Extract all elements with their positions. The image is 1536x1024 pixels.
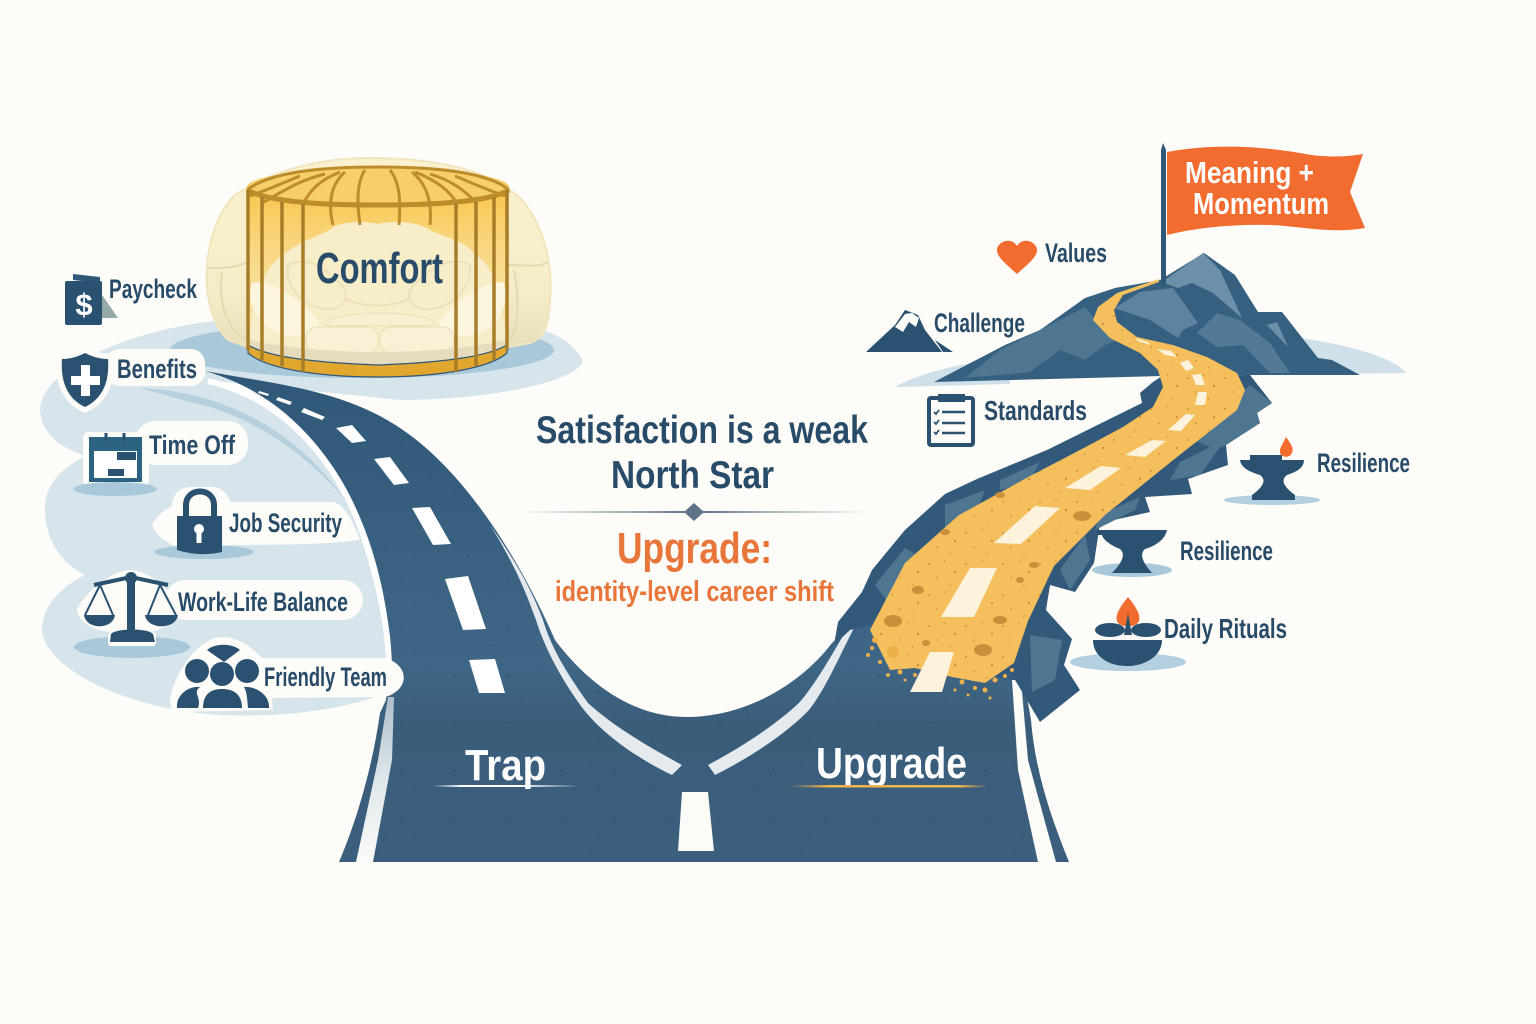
headline: Satisfaction is a weak	[536, 409, 868, 452]
center message: North Star	[611, 454, 774, 497]
left road white edge	[208, 381, 389, 695]
item: Paycheck: Paycheck	[109, 274, 198, 304]
sofa	[250, 222, 507, 367]
item: Challenge: Challenge	[934, 308, 1025, 338]
item: Resilience upper	[1224, 437, 1410, 505]
road surface	[205, 371, 1069, 862]
center message: identity-level career shift	[555, 576, 834, 608]
gold base	[248, 345, 507, 377]
flag	[1161, 143, 1365, 285]
item: Benefits: Benefits	[117, 354, 197, 384]
item: Resilience lower	[1092, 530, 1273, 577]
item: Standards: Standards	[984, 395, 1087, 426]
path dashes	[910, 338, 1207, 692]
cushion	[207, 158, 551, 347]
road shadow sliver	[140, 388, 345, 500]
item: Time Off: Time Off	[149, 430, 236, 460]
road network	[205, 371, 1069, 862]
item: Values: Values	[1045, 238, 1107, 268]
item: Work-Life Balance: Work-Life Balance	[178, 587, 348, 617]
cage glow	[248, 190, 507, 371]
label: Trap: Trap	[465, 741, 546, 790]
item: Friendly Team: Friendly Team	[264, 662, 387, 692]
item: Challenge	[866, 308, 1025, 352]
lane line right	[708, 620, 858, 775]
item: Friendly Team	[177, 645, 387, 708]
item: Time Off	[73, 430, 236, 496]
lane line left	[490, 525, 682, 775]
item: Resilience upper: Resilience	[1317, 448, 1410, 478]
left bottom stripe	[356, 697, 394, 862]
item: Benefits	[62, 353, 197, 407]
comfort shadow	[170, 322, 554, 378]
white label halos	[62, 349, 404, 712]
left road dashes	[258, 391, 505, 693]
center message	[518, 409, 872, 608]
rocks beside path	[834, 375, 1272, 722]
cage bars	[248, 190, 507, 372]
item: Job Security: Job Security	[229, 508, 342, 538]
cage ribs	[247, 167, 509, 225]
golden upgrade path	[866, 279, 1245, 700]
comfort cage	[207, 158, 551, 377]
gravel edge	[866, 637, 1014, 700]
flag: Meaning +	[1185, 155, 1314, 190]
mountain	[895, 253, 1406, 387]
item: Daily Rituals: Daily Rituals	[1164, 613, 1287, 644]
upgrade heading: Upgrade:	[617, 524, 772, 573]
right bottom stripe	[1012, 680, 1056, 862]
item: Work-Life Balance	[74, 572, 348, 658]
panel: comfort benefits backdrop	[40, 320, 583, 716]
label: Comfort: Comfort	[316, 244, 443, 293]
item: Daily Rituals	[1070, 597, 1287, 671]
label: Upgrade: Upgrade	[816, 739, 967, 788]
divider	[518, 511, 872, 513]
center dash	[678, 792, 714, 851]
item: Standards	[929, 394, 1087, 445]
item: Resilience lower: Resilience	[1180, 536, 1273, 566]
item: Paycheck	[65, 274, 198, 325]
item: Paycheck: $	[75, 287, 93, 322]
flag: Momentum	[1193, 186, 1329, 221]
item: Values	[997, 238, 1107, 274]
cushion seams	[208, 262, 547, 340]
cage dome	[247, 168, 509, 206]
item: Job Security	[154, 492, 342, 559]
gravel spots	[884, 492, 1091, 656]
